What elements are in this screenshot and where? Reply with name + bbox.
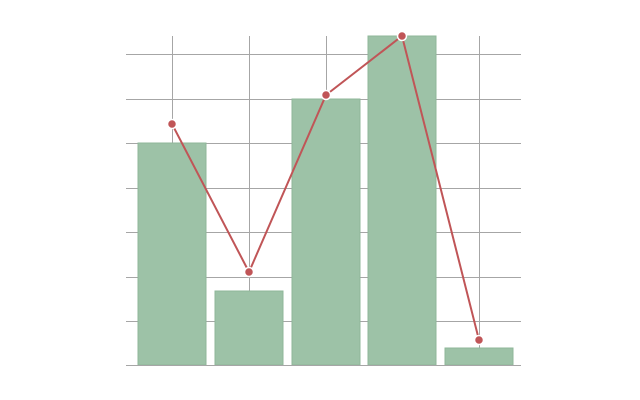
bars xyxy=(138,36,513,365)
line series xyxy=(168,32,484,344)
